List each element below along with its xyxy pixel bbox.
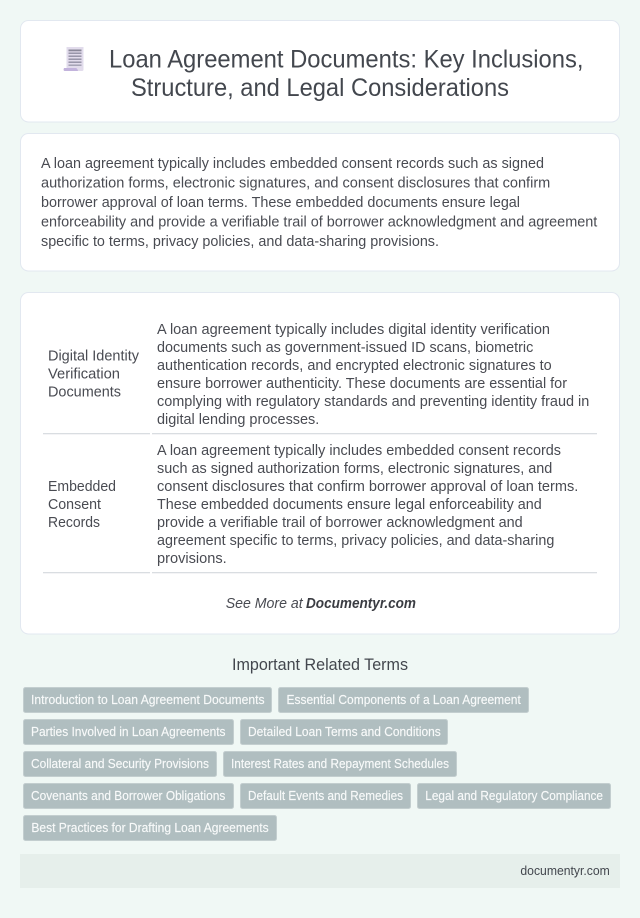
title bbox=[109, 46, 584, 102]
text block: intro: borrower approval of loan terms. These embedded documents ensure legal bbox=[41, 195, 520, 211]
row label: digital identity: Documents bbox=[48, 384, 121, 400]
row text: digital identity: complying with regulatory standards and preventing identity fraud in bbox=[157, 394, 589, 410]
row label: embedded consent: Consent bbox=[48, 497, 101, 513]
tag: Default Events and Remedies bbox=[248, 789, 403, 803]
text block: intro: enforceability and provide a verifiable trail of borrower acknowledgment and agreement bbox=[41, 214, 597, 230]
text block: intro: A loan agreement typically includes embedded consent records such as signed bbox=[41, 156, 544, 172]
row text: embedded consent: agreement specific to terms, privacy policies, and data-sharing bbox=[157, 533, 554, 549]
tag bbox=[24, 784, 234, 808]
tag bbox=[24, 720, 234, 744]
tag bbox=[224, 752, 456, 776]
tag: Detailed Loan Terms and Conditions bbox=[248, 725, 441, 739]
row label: embedded consent: Embedded bbox=[48, 479, 116, 495]
row text: embedded consent: consent disclosures that confirm borrower approval of loan terms. bbox=[157, 479, 578, 495]
tag bbox=[240, 720, 448, 744]
footer: documentyr.com bbox=[520, 863, 610, 878]
tag: Best Practices for Drafting Loan Agreements bbox=[31, 821, 269, 835]
text block: intro: authorization forms, electronic signatures, and consent disclosures that confirm bbox=[41, 176, 550, 192]
tag: Introduction to Loan Agreement Documents bbox=[31, 693, 264, 707]
see more link: Documentyr.com bbox=[306, 596, 416, 612]
icon: document scroll bbox=[64, 47, 84, 71]
row text: embedded consent: provisions. bbox=[157, 551, 227, 567]
row text: digital identity: ensure borrower authenticity. These documents are essential for bbox=[157, 376, 567, 392]
text block: intro: specific to terms, privacy policies, and data-sharing provisions. bbox=[41, 234, 439, 250]
table row: digital identity verification documents bbox=[48, 322, 589, 428]
tag bbox=[240, 784, 410, 808]
panel: intro paragraph bbox=[20, 134, 620, 271]
row label: digital identity bbox=[48, 348, 140, 400]
tag bbox=[24, 816, 276, 840]
row text: digital identity: A loan agreement typically includes digital identity verification bbox=[157, 322, 550, 338]
row label: embedded consent: Records bbox=[48, 515, 100, 531]
row text: digital identity bbox=[157, 322, 589, 428]
row text: digital identity: digital lending processes. bbox=[157, 412, 319, 428]
row label: digital identity: Verification bbox=[48, 366, 120, 382]
title: Loan Agreement Documents: Key Inclusions, bbox=[109, 46, 584, 74]
related terms tags bbox=[24, 688, 610, 840]
row text: embedded consent: such as signed authorization forms, electronic signatures, and bbox=[157, 461, 552, 477]
footer bbox=[20, 854, 620, 888]
tag: Interest Rates and Repayment Schedules bbox=[231, 757, 449, 771]
row text: embedded consent: provide a verifiable trail of borrower acknowledgment and bbox=[157, 515, 523, 531]
row text: embedded consent: These embedded documents ensure legal enforceability and bbox=[157, 497, 542, 513]
row label: digital identity: Digital Identity bbox=[48, 348, 140, 364]
tag: Covenants and Borrower Obligations bbox=[31, 789, 225, 803]
tag bbox=[418, 784, 610, 808]
see more link bbox=[226, 596, 416, 612]
panel: document table bbox=[20, 292, 620, 634]
tag bbox=[24, 752, 216, 776]
row text: embedded consent: A loan agreement typically includes embedded consent records bbox=[157, 443, 561, 459]
tag bbox=[24, 688, 272, 712]
row label: embedded consent bbox=[48, 479, 116, 531]
tag: Legal and Regulatory Compliance bbox=[425, 789, 603, 803]
see more link: See More at bbox=[226, 596, 304, 612]
row text: embedded consent bbox=[157, 443, 578, 567]
tag: Essential Components of a Loan Agreement bbox=[286, 693, 521, 707]
tag bbox=[278, 688, 528, 712]
panel: title card bbox=[20, 20, 620, 122]
tag: Collateral and Security Provisions bbox=[31, 757, 209, 771]
heading: important related terms: Important Related Terms bbox=[232, 655, 408, 674]
table row: embedded consent records bbox=[48, 443, 578, 567]
tag: Parties Involved in Loan Agreements bbox=[31, 725, 226, 739]
row text: digital identity: documents such as government-issued ID scans, biometric bbox=[157, 340, 534, 356]
text block: intro bbox=[41, 156, 597, 250]
row text: digital identity: authentication records, and encrypted electronic signatures to bbox=[157, 358, 552, 374]
title: Structure, and Legal Considerations bbox=[131, 74, 509, 102]
